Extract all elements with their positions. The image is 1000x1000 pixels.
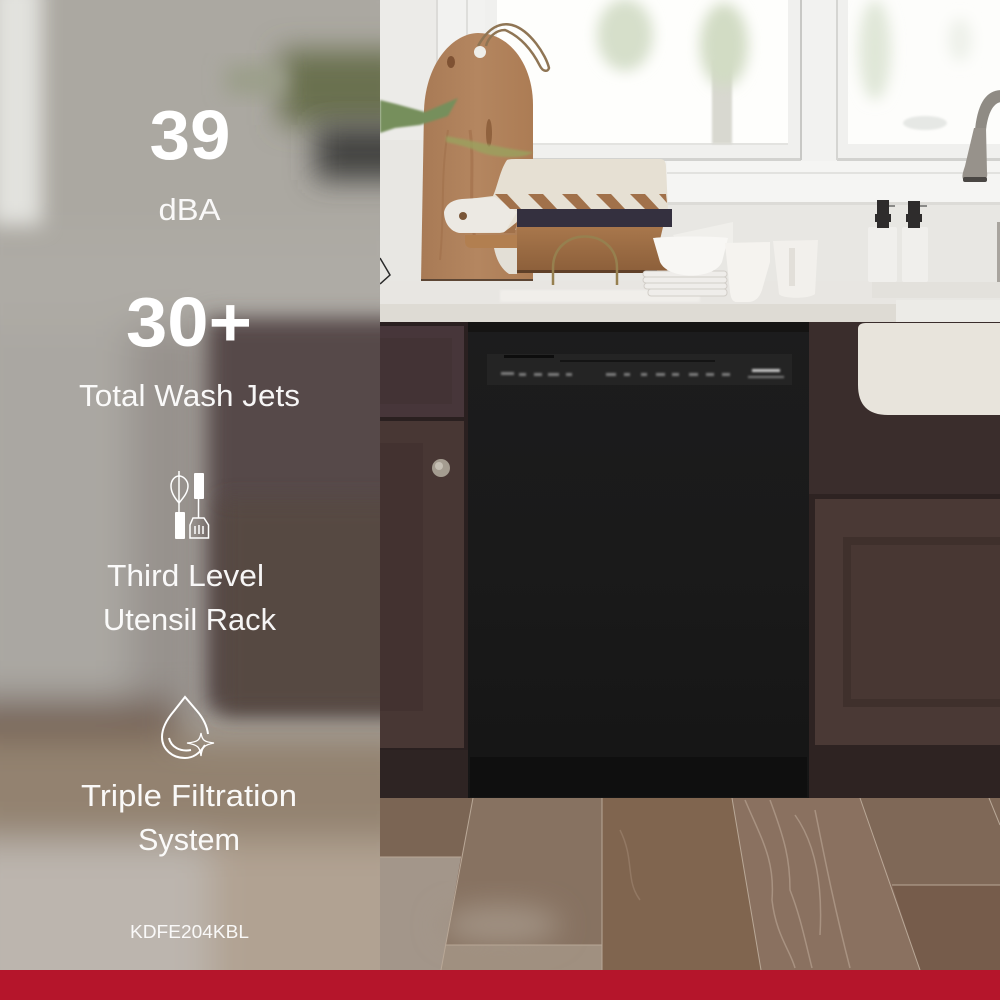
stat: 30+ total wash jets: Total Wash Jets (79, 378, 300, 413)
wooden paddle board (421, 24, 549, 283)
marble board (444, 159, 668, 233)
label: triple filtration system: Triple Filtration (81, 778, 297, 813)
sink deck (872, 282, 1000, 323)
left cabinet (380, 322, 470, 802)
right cabinets (808, 322, 1000, 800)
stat: 39 dBA: 39 (150, 96, 230, 174)
plant (380, 98, 533, 157)
icon: whisk and spatula (171, 471, 208, 539)
dishwasher (468, 322, 809, 798)
blurred plant (225, 50, 415, 180)
faucet (962, 90, 1000, 282)
label: third level utensil rack: Utensil Rack (103, 602, 276, 637)
blurred window highlight (0, 0, 42, 225)
mug right (773, 240, 818, 298)
window glass right (848, 0, 1000, 144)
window casing (380, 0, 1000, 205)
cabinet knob (432, 459, 450, 477)
label: third level utensil rack (103, 558, 276, 637)
stat: 39 dBA: dBA (158, 192, 221, 227)
stat: 30+ total wash jets: 30+ (126, 283, 252, 361)
wall (380, 140, 1000, 300)
window glass left with blurred trees (497, 0, 788, 145)
model number: KDFE204KBL (130, 922, 249, 942)
frosted left panel (0, 0, 380, 970)
bowls (653, 236, 728, 276)
soap bottles (868, 200, 928, 282)
stacked plates (643, 271, 727, 296)
red footer band (0, 970, 1000, 1000)
label: triple filtration system (81, 778, 297, 857)
lower wood board (465, 227, 668, 274)
kitchen photo (380, 0, 1000, 970)
control panel (487, 354, 792, 385)
blurred cabinet shadow (207, 318, 417, 710)
icon: water drop with sparkle (162, 697, 214, 758)
label: triple filtration system: System (138, 822, 240, 857)
brass rack (553, 236, 617, 285)
navy board (517, 209, 672, 227)
farmhouse sink (858, 323, 1000, 415)
label: third level utensil rack: Third Level (107, 558, 264, 593)
wood floor (380, 798, 1000, 970)
mug left (725, 242, 770, 302)
stat: 39 dBA (150, 96, 230, 227)
counter (380, 258, 896, 322)
stat: 30+ total wash jets (79, 283, 300, 413)
